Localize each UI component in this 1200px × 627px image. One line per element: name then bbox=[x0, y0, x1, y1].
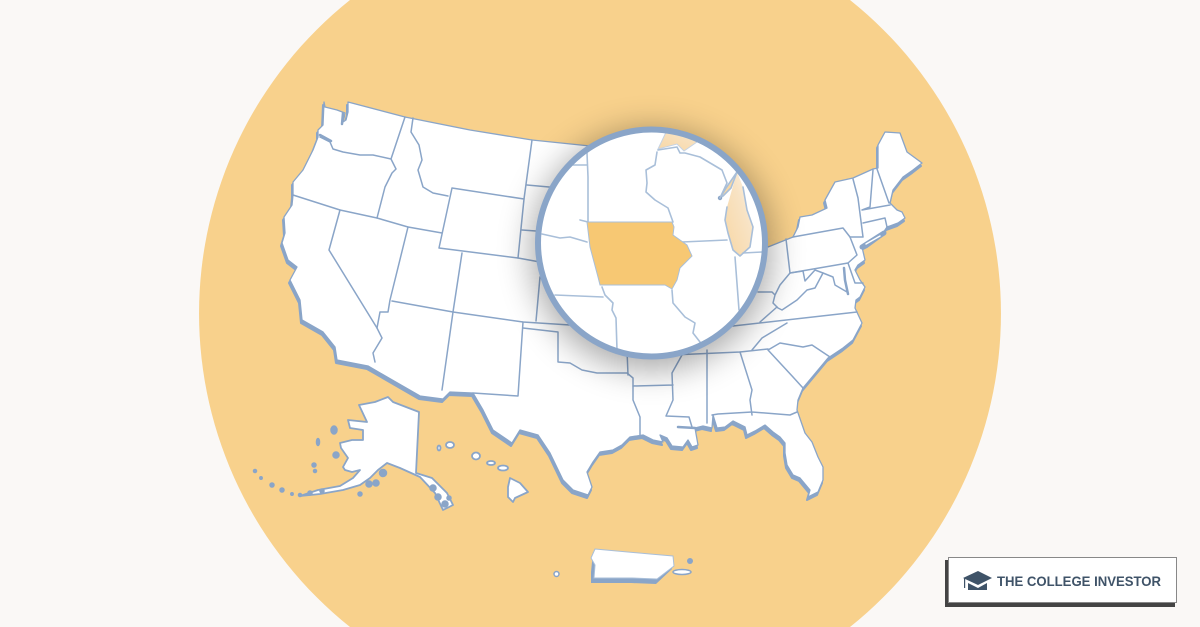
coast shadow bbox=[281, 105, 921, 500]
orange background circle bbox=[199, 0, 1001, 627]
land mass bbox=[282, 102, 922, 497]
Puerto Rico shadow bbox=[591, 552, 672, 584]
Lake Superior bbox=[657, 133, 697, 152]
logo text: THE COLLEGE INVESTOR bbox=[997, 573, 1161, 589]
Alaska islands bbox=[254, 426, 451, 507]
magnifier shadow bbox=[532, 130, 772, 370]
logo bbox=[945, 558, 1176, 607]
Green Bay bbox=[720, 172, 737, 198]
Long Island bbox=[862, 233, 884, 247]
icon: graduation cap bbox=[963, 571, 992, 590]
map: contiguous United States bbox=[281, 102, 922, 500]
logo shadow bbox=[945, 560, 1175, 607]
logo box bbox=[948, 558, 1176, 602]
Iowa bbox=[587, 222, 692, 289]
lens ring bbox=[538, 130, 765, 356]
Puerto Rico island bbox=[591, 549, 674, 579]
Hawaii smaller islands bbox=[438, 442, 508, 470]
Alaska outline bbox=[300, 397, 453, 510]
map: Alaska bbox=[254, 397, 453, 510]
state borders bbox=[293, 117, 890, 435]
Lake Michigan bbox=[725, 172, 753, 256]
coastal inlets bbox=[320, 113, 848, 428]
magnifier bbox=[538, 128, 765, 356]
Mona island bbox=[554, 572, 559, 576]
lens interior bbox=[538, 130, 765, 356]
map: Hawaii bbox=[438, 442, 528, 502]
Hawaii big island bbox=[508, 478, 528, 502]
magnified state borders bbox=[542, 147, 762, 350]
Vieques and Culebra bbox=[673, 558, 693, 574]
map: Puerto Rico bbox=[554, 549, 693, 584]
